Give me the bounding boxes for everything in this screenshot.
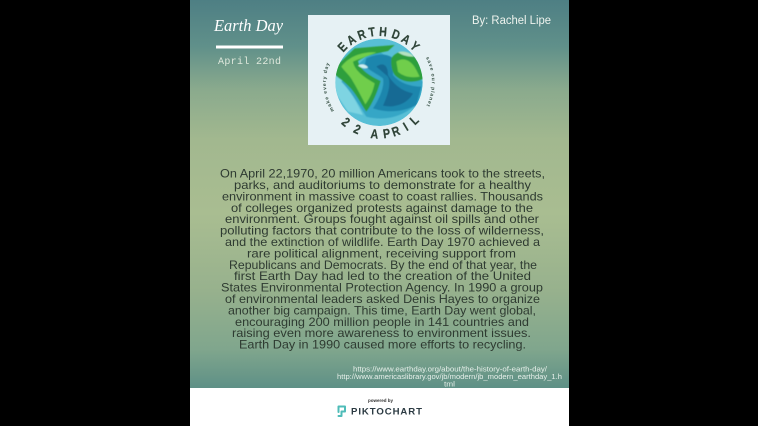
arc text: EARTH DAY: T	[368, 24, 377, 40]
text block: source links: https://www.earthday.org/about/the-history-of-earth-day/	[353, 366, 547, 374]
arc text: 22 APRIL: A	[370, 126, 379, 142]
text block: Earth Day history: polluting factors that contribute to the loss of wilderness,	[220, 224, 544, 238]
text block: Earth Day history: and the extinction of wildlife. Earth Day 1970 achieved a	[225, 235, 540, 249]
arc text: EARTH DAY: D	[390, 26, 403, 43]
text block: source links: http://www.americaslibrary.gov/jb/modern/jb_modern_earthday_1.h	[337, 374, 562, 381]
divider bar under heading	[216, 46, 283, 48]
text block: Earth Day history: Republicans and Democrats. By the end of that year, the	[229, 258, 537, 272]
icon: layered globe	[334, 39, 425, 126]
arc text: save our planet: save our planet	[426, 57, 435, 106]
arc text: 22 APRIL: 2	[351, 121, 363, 138]
image: Earth Day globe card	[308, 15, 450, 145]
arc text: make every day: make every day	[323, 62, 334, 112]
text block: Earth Day history	[220, 166, 545, 352]
heading: Earth Day: Earth Day	[213, 16, 283, 35]
text block: Earth Day history: first Earth Day had led to the creation of the United	[234, 269, 531, 283]
arc text: EARTH DAY: R	[355, 26, 368, 43]
footer: powered by label: powered by	[368, 398, 393, 403]
arc text: 22 APRIL: 2	[339, 114, 353, 130]
panel: gradient background	[190, 0, 569, 388]
arc text: 22 APRIL: P	[382, 125, 391, 142]
text block: Earth Day history: of colleges organized protests against damage to the	[231, 201, 533, 215]
text block: source links: tml	[444, 382, 456, 388]
arc text: 22 APRIL: I	[400, 119, 411, 134]
arc text: 22 APRIL: L	[407, 112, 422, 128]
arc text: EARTH DAY: A	[399, 31, 414, 48]
date label: April 22nd	[218, 56, 281, 68]
infographic poster	[190, 0, 569, 426]
author credit: By: Rachel Lipe	[472, 15, 551, 27]
arc text: 22 APRIL	[339, 112, 422, 142]
text block: Earth Day history: encouraging 200 million people in 141 countries and	[235, 315, 529, 329]
footer: Piktochart wordmark: PIKTOCHART	[351, 406, 422, 418]
arc text: EARTH DAY: Y	[407, 38, 423, 54]
arc text: EARTH DAY	[334, 24, 423, 55]
text block: Earth Day history: rare political alignment, receiving support from	[247, 246, 516, 260]
arc text: EARTH DAY: A	[344, 31, 359, 48]
text block: Earth Day history: Earth Day in 1990 caused more efforts to recycling.	[239, 338, 526, 352]
arc text: EARTH DAY: H	[379, 24, 387, 40]
text block: Earth Day history: raising even more awareness to environment issues.	[232, 326, 531, 340]
icon: Piktochart logo	[338, 406, 345, 416]
footer: white band	[190, 388, 569, 426]
text block: Earth Day history: another big campaign. This time, Earth Day went global,	[228, 303, 536, 317]
text block: source links	[337, 366, 562, 388]
arc text: EARTH DAY: E	[334, 39, 350, 55]
text block: Earth Day history: environment. Groups fought against oil spills and other	[225, 212, 539, 226]
text block: Earth Day history: parks, and auditoriums to demonstrate for a healthy	[234, 178, 531, 192]
text block: Earth Day history: On April 22,1970, 20 million Americans took to the streets,	[220, 166, 545, 180]
text block: Earth Day history: of environmental leaders asked Denis Hayes to organize	[225, 292, 540, 306]
text block: Earth Day history: States Environmental Protection Agency. In 1990 a group	[221, 281, 543, 295]
arc text: 22 APRIL: R	[390, 123, 402, 140]
text block: Earth Day history: environment in massive coast to coast rallies. Thousands	[222, 189, 543, 203]
